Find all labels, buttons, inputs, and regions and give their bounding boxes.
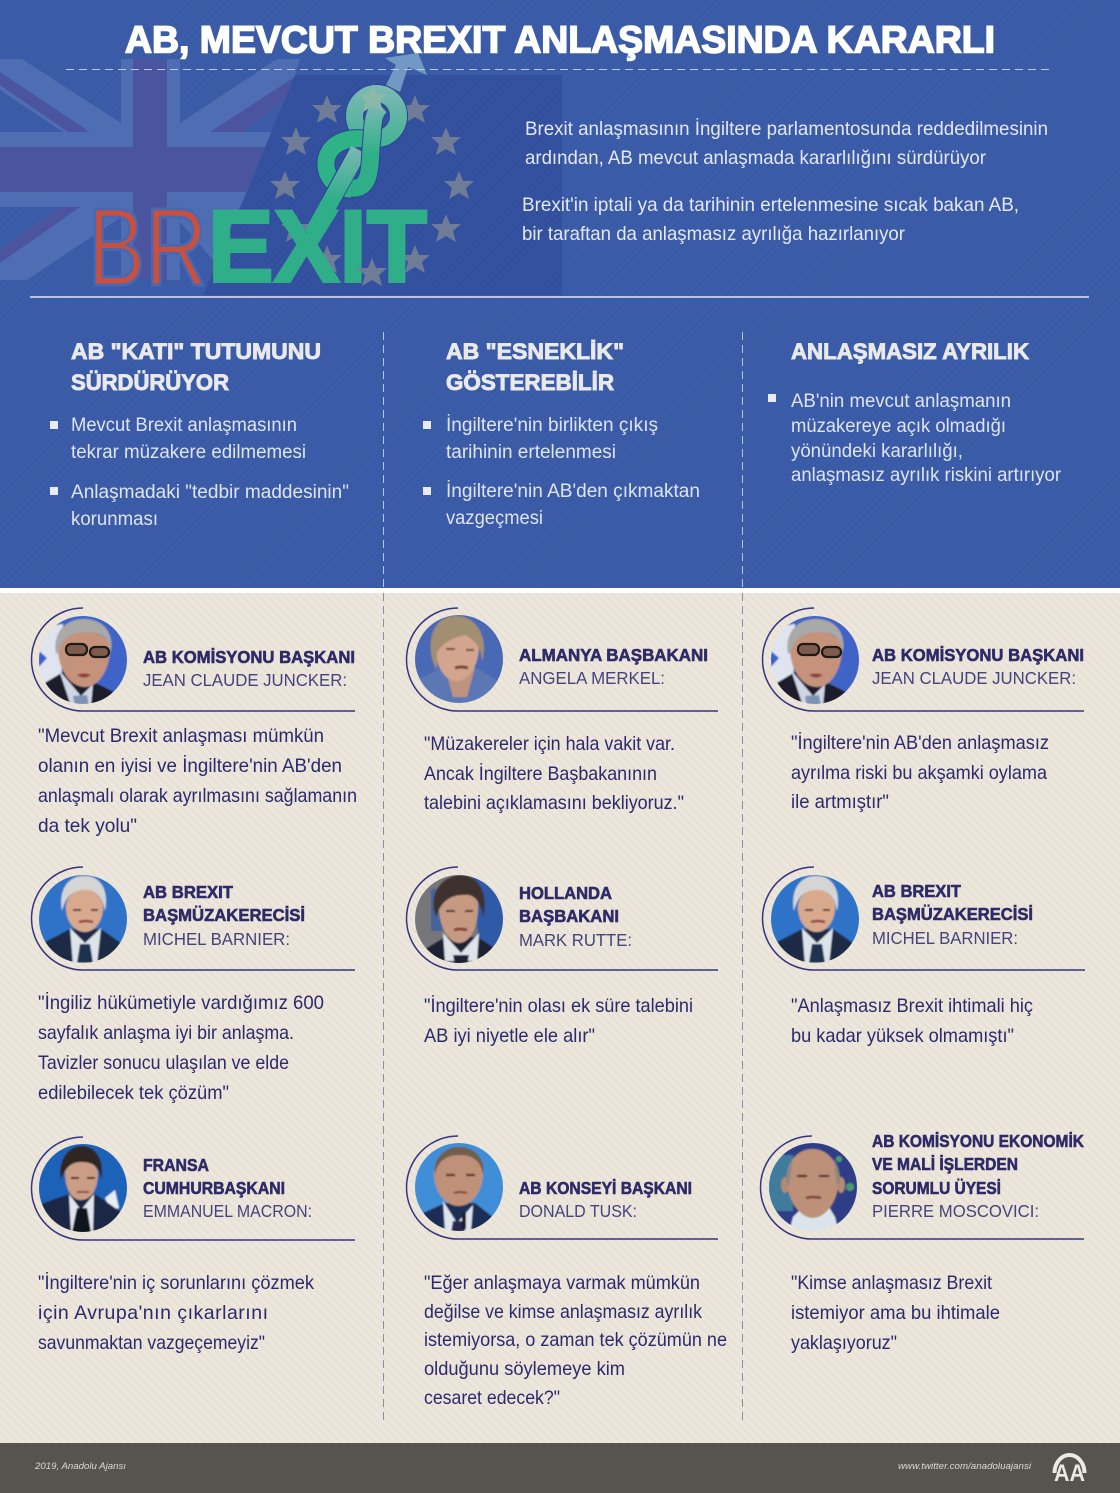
quote <box>38 725 357 837</box>
bullet: anlaşmasız ayrılık riskini artırıyor <box>791 465 1062 486</box>
knot <box>312 94 398 235</box>
quote: "İngiltere'nin AB'den anlaşmasız <box>791 731 1049 754</box>
quote: için Avrupa'nın çıkarlarını <box>38 1302 268 1324</box>
name: AB BREXIT <box>872 881 961 901</box>
quote: talebini açıklamasını bekliyoruz." <box>424 792 684 814</box>
portrait: Juncker <box>770 615 860 710</box>
name: AB BREXIT <box>143 882 233 902</box>
card: Macron <box>32 1137 355 1354</box>
quote: olduğunu söylemeye kim <box>424 1358 625 1380</box>
quote: "Anlaşmasız Brexit ihtimali hiç <box>791 995 1033 1017</box>
quote: ile artmıştır" <box>791 791 889 813</box>
name: AB KONSEYİ BAŞKANI <box>519 1178 692 1198</box>
name: AB KOMİSYONU BAŞKANI <box>872 645 1084 665</box>
quote <box>791 1272 1000 1354</box>
portrait: Moscovici <box>768 1142 858 1233</box>
quote: bu kadar yüksek olmamıştı" <box>791 1025 1014 1047</box>
quote: da tek yolu" <box>38 815 137 837</box>
panel: anlaşmasız ayrılık <box>768 339 1062 486</box>
quote <box>424 1272 727 1409</box>
name: CUMHURBAŞKANI <box>143 1178 285 1198</box>
quote <box>38 991 324 1104</box>
bullets: tekrar müzakere edilmemesi <box>71 442 306 463</box>
bullets: İngiltere'nin birlikten çıkış <box>446 415 658 436</box>
quote: "Müzakereler için hala vakit var. <box>424 733 675 755</box>
overlay stars <box>357 84 388 286</box>
intro text: Brexit anlaşmasının İngiltere parlamentosunda reddedilmesinin <box>525 117 1048 140</box>
intro text: Brexit'in iptali ya da tarihinin ertelenmesine sıcak bakan AB, <box>522 194 1019 216</box>
quote <box>424 994 693 1047</box>
quote: Ancak İngiltere Başbakanının <box>424 762 657 785</box>
bullets: tarihinin ertelenmesi <box>446 442 616 463</box>
card: Merkel <box>406 608 718 814</box>
portrait: Macron <box>38 1143 128 1238</box>
bullets: İngiltere'nin AB'den çıkmaktan <box>446 481 700 502</box>
name: ANGELA MERKEL: <box>519 668 665 688</box>
name <box>143 882 305 949</box>
name: MARK RUTTE: <box>519 930 632 950</box>
portrait: Merkel <box>414 614 504 709</box>
bullets: vazgeçmesi <box>446 508 543 529</box>
card: Juncker 2 <box>762 608 1084 813</box>
name <box>872 645 1084 688</box>
name: SORUMLU ÜYESİ <box>872 1178 1001 1198</box>
heading <box>71 339 321 395</box>
brexit illustration <box>0 53 562 308</box>
quote <box>791 995 1033 1047</box>
bullet: yönündeki kararlılığı, <box>791 441 963 462</box>
name: MICHEL BARNIER: <box>143 929 290 949</box>
name <box>143 1155 312 1221</box>
quote: "Eğer anlaşmaya varmak mümkün <box>424 1272 700 1294</box>
quote <box>791 731 1049 813</box>
intro text <box>522 117 1048 245</box>
quote: edilebilecek tek çözüm" <box>38 1082 229 1104</box>
name: AB KOMİSYONU EKONOMİK <box>872 1131 1084 1151</box>
intro text: ardından, AB mevcut anlaşmada kararlılığını sürdürüyor <box>525 147 986 169</box>
name: JEAN CLAUDE JUNCKER: <box>143 670 347 690</box>
quote: "İngiltere'nin iç sorunlarını çözmek <box>38 1271 314 1294</box>
quote: istemiyorsa, o zaman tek çözümün ne <box>424 1329 727 1351</box>
quote <box>424 733 684 814</box>
footer bar <box>0 1443 1120 1493</box>
portrait: Barnier <box>770 874 860 969</box>
heading: SÜRDÜRÜYOR <box>71 370 229 395</box>
card: Juncker 1 <box>32 608 357 837</box>
portrait: Juncker <box>38 615 128 710</box>
panel: AB katı tutumunu sürdürüyor <box>50 339 349 530</box>
name: PIERRE MOSCOVICI: <box>872 1201 1039 1221</box>
panel: AB esneklik gösterebilir <box>423 339 700 529</box>
name: ALMANYA BAŞBAKANI <box>519 645 708 665</box>
bullet: AB'nin mevcut anlaşmanın <box>791 391 1011 412</box>
portrait: Rutte <box>414 874 504 969</box>
name: VE MALİ İŞLERDEN <box>872 1154 1018 1174</box>
heading <box>446 339 624 395</box>
name: JEAN CLAUDE JUNCKER: <box>872 668 1076 688</box>
name: HOLLANDA <box>519 883 612 903</box>
footer credit: 2019, Anadolu Ajansı <box>34 1461 126 1472</box>
BR wordmark: BR <box>88 186 207 308</box>
bullets <box>423 415 700 529</box>
title: AB, MEVCUT BREXIT ANLAŞMASINDA KARARLI <box>125 20 995 62</box>
quote: "Kimse anlaşmasız Brexit <box>791 1272 993 1294</box>
icon: Anadolu Agency logo: AA <box>1054 1460 1085 1487</box>
quote: cesaret edecek?" <box>424 1387 560 1409</box>
name: BAŞMÜZAKERECİSİ <box>143 905 305 925</box>
footer twitter link: www.twitter.com/anadoluajansi <box>898 1461 1032 1472</box>
arrow <box>385 53 427 92</box>
bullets: Anlaşmadaki "tedbir maddesinin" <box>71 482 349 503</box>
quote: "İngiliz hükümetiyle vardığımız 600 <box>38 991 324 1014</box>
quote: olanın en iyisi ve İngiltere'nin AB'den <box>38 754 342 777</box>
quote: yaklaşıyoruz" <box>791 1332 897 1354</box>
EXIT wordmark: EXIT <box>208 190 427 304</box>
name: BAŞBAKANI <box>519 906 619 926</box>
name <box>143 647 355 690</box>
quote: "Mevcut Brexit anlaşması mümkün <box>38 725 324 747</box>
name: EMMANUEL MACRON: <box>143 1201 312 1221</box>
bullets: korunması <box>71 509 158 530</box>
quote: AB iyi niyetle ele alır" <box>424 1025 595 1047</box>
card: Barnier 1 <box>32 867 355 1104</box>
name <box>519 1178 692 1221</box>
bullets: Mevcut Brexit anlaşmasının <box>71 415 297 436</box>
beige background <box>0 593 1120 1443</box>
quote: istemiyor ama bu ihtimale <box>791 1302 1000 1324</box>
blue header background <box>0 0 1120 588</box>
heading: GÖSTEREBİLİR <box>446 370 614 395</box>
quote: "İngiltere'nin olası ek süre talebini <box>424 994 693 1017</box>
name <box>872 1131 1084 1221</box>
quote: savunmaktan vazgeçemeyiz" <box>38 1332 265 1354</box>
quote: sayfalık anlaşma iyi bir anlaşma. <box>38 1022 294 1044</box>
name <box>872 881 1033 948</box>
portrait: Tusk <box>414 1142 504 1237</box>
quote: Tavizler sonucu ulaşılan ve elde <box>38 1052 289 1074</box>
name <box>519 645 708 688</box>
name: MICHEL BARNIER: <box>872 928 1018 948</box>
card: Moscovici <box>760 1131 1084 1354</box>
name: BAŞMÜZAKERECİSİ <box>872 904 1033 924</box>
bullets <box>50 415 349 530</box>
quote: anlaşmalı olarak ayrılmasını sağlamanın <box>38 785 357 807</box>
card: Tusk <box>406 1136 727 1409</box>
name: DONALD TUSK: <box>519 1201 637 1221</box>
intro text: bir taraftan da anlaşmasız ayrılığa hazırlanıyor <box>522 223 905 245</box>
bullet <box>768 391 1062 486</box>
quote: değilse ve kimse anlaşmasız ayrılık <box>424 1301 702 1323</box>
name: AB KOMİSYONU BAŞKANI <box>143 647 355 667</box>
quote: ayrılma riski bu akşamki oylama <box>791 762 1047 784</box>
heading: AB "KATI" TUTUMUNU <box>71 339 321 364</box>
quote <box>38 1271 314 1354</box>
union jack flag <box>0 59 300 280</box>
name <box>519 883 632 950</box>
portrait: Barnier <box>38 874 128 969</box>
bullet: müzakereye açık olmadığı <box>791 416 1006 437</box>
name: FRANSA <box>143 1155 209 1175</box>
card: Barnier 2 <box>762 867 1085 1047</box>
dark panel <box>203 75 562 295</box>
heading: AB "ESNEKLİK" <box>446 339 624 364</box>
EU stars <box>270 95 474 273</box>
card: Rutte <box>406 867 718 1047</box>
heading: ANLAŞMASIZ AYRILIK <box>791 339 1030 364</box>
